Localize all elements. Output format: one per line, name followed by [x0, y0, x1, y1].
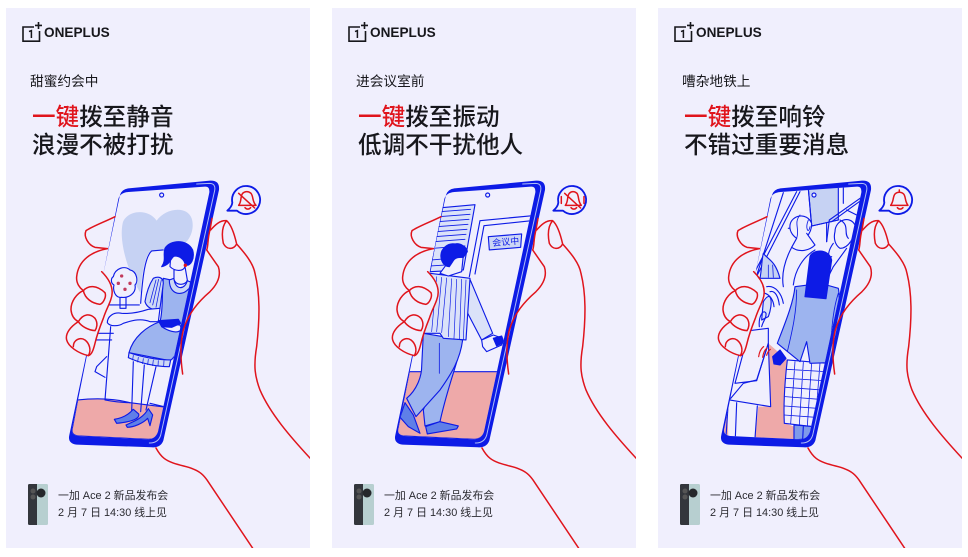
- headline: [358, 104, 523, 159]
- headline: 低调不干扰他人: [358, 133, 523, 159]
- table and vase: [97, 297, 139, 340]
- launch event text: [710, 490, 820, 519]
- back finger: [411, 217, 441, 249]
- heart: [122, 210, 193, 293]
- icon: ringing bell bubble: [879, 186, 912, 214]
- illustration: hand holding phone, vibrate: [392, 180, 636, 548]
- scene caption: 进会议室前: [356, 74, 424, 89]
- illustration: hand holding phone, ring: [718, 180, 962, 548]
- window blinds: [430, 205, 475, 272]
- shopping bag and seat: [735, 328, 768, 383]
- thumb and palm: [507, 218, 545, 374]
- right window rail: [827, 196, 863, 242]
- launch event text: 2 月 7 日 14:30 线上见: [710, 507, 819, 519]
- jacket: [777, 285, 839, 363]
- trousers: [422, 359, 458, 426]
- arm and hands: [107, 308, 160, 326]
- dark hand: [773, 350, 786, 365]
- hand outline: [392, 217, 639, 552]
- thumb and palm: [181, 218, 219, 374]
- shoes: [426, 422, 458, 434]
- brand name: ONEPLUS: [696, 25, 762, 40]
- phone frame: [395, 181, 545, 447]
- dress top: [160, 278, 190, 328]
- sign label: 会议中: [492, 235, 520, 248]
- phone thumbnail: [680, 484, 700, 525]
- skirt: [129, 322, 185, 361]
- phone frame: [69, 181, 219, 447]
- fingers: [718, 249, 764, 356]
- launch event text: [384, 490, 494, 519]
- logo mark: [348, 22, 368, 42]
- brand name: ONEPLUS: [44, 25, 110, 40]
- camera: [812, 193, 816, 197]
- clutch: [158, 319, 181, 327]
- door: [469, 216, 533, 277]
- icon: silent bell bubble: [227, 186, 260, 214]
- illustration: hand holding phone, silent: [66, 180, 310, 548]
- hair: [441, 244, 467, 267]
- back finger: [85, 217, 115, 249]
- launch event text: 一加 Ace 2 新品发布会: [384, 490, 494, 502]
- screen scene: subway: [723, 187, 863, 440]
- logo mark: [674, 22, 694, 42]
- panel: ring mode on the subway: [658, 8, 962, 548]
- chair: [95, 250, 177, 407]
- face and collar: [440, 255, 463, 276]
- hand outline: [66, 217, 313, 552]
- hand with phone: [482, 335, 503, 352]
- phone thumbnail: [354, 484, 374, 525]
- back window: [808, 187, 838, 226]
- fingers: [66, 249, 112, 356]
- headline: 浪漫不被打扰: [32, 133, 174, 159]
- brand name: ONEPLUS: [370, 25, 436, 40]
- pink floor: [755, 343, 794, 440]
- passenger right: [834, 220, 855, 248]
- headline: [32, 104, 174, 159]
- icon: vibrate bell bubble: [553, 186, 586, 214]
- launch event text: 2 月 7 日 14:30 线上见: [384, 507, 493, 519]
- headline: 一键拨至静音: [32, 105, 174, 131]
- headline: 一键拨至响铃: [684, 105, 826, 131]
- bouquet: [111, 268, 137, 297]
- phone thumbnail: [28, 484, 48, 525]
- fingers: [392, 249, 438, 356]
- floor: [72, 399, 167, 439]
- hand outline: [718, 217, 965, 552]
- launch event text: [58, 490, 168, 519]
- launch event text: 2 月 7 日 14:30 线上见: [58, 507, 167, 519]
- shoes: [114, 409, 139, 423]
- headline: 一键拨至振动: [358, 105, 500, 131]
- panel: vibrate mode before a meeting: [332, 8, 636, 548]
- sleeve: [466, 279, 493, 340]
- skirt plaid: [784, 360, 827, 427]
- face and neck: [174, 267, 187, 284]
- logo mark: [22, 22, 42, 42]
- meeting sign: [488, 234, 522, 250]
- panel: silent mode on a date: [6, 8, 310, 548]
- motion marks: [759, 347, 770, 357]
- lower legs: [794, 425, 814, 440]
- screen scene: date: [72, 210, 197, 439]
- headline: 不错过重要消息: [684, 133, 849, 159]
- jacket: [423, 273, 470, 340]
- scene caption: 甜蜜约会中: [30, 74, 98, 89]
- floor: [398, 372, 500, 439]
- phone frame: [721, 181, 871, 447]
- launch event text: 一加 Ace 2 新品发布会: [710, 490, 820, 502]
- sleeve: [145, 277, 163, 309]
- strap and sleeve: [760, 253, 780, 278]
- legs: [132, 362, 156, 412]
- scene caption: 嘈杂地铁上: [682, 74, 750, 89]
- screen scene: meeting room: [398, 205, 533, 439]
- hair: [805, 251, 832, 299]
- back finger: [737, 217, 767, 249]
- thumb and palm: [833, 218, 871, 374]
- passenger left: [790, 216, 812, 239]
- launch event text: 一加 Ace 2 新品发布会: [58, 490, 168, 502]
- hair: [162, 242, 193, 267]
- headline: [684, 104, 849, 159]
